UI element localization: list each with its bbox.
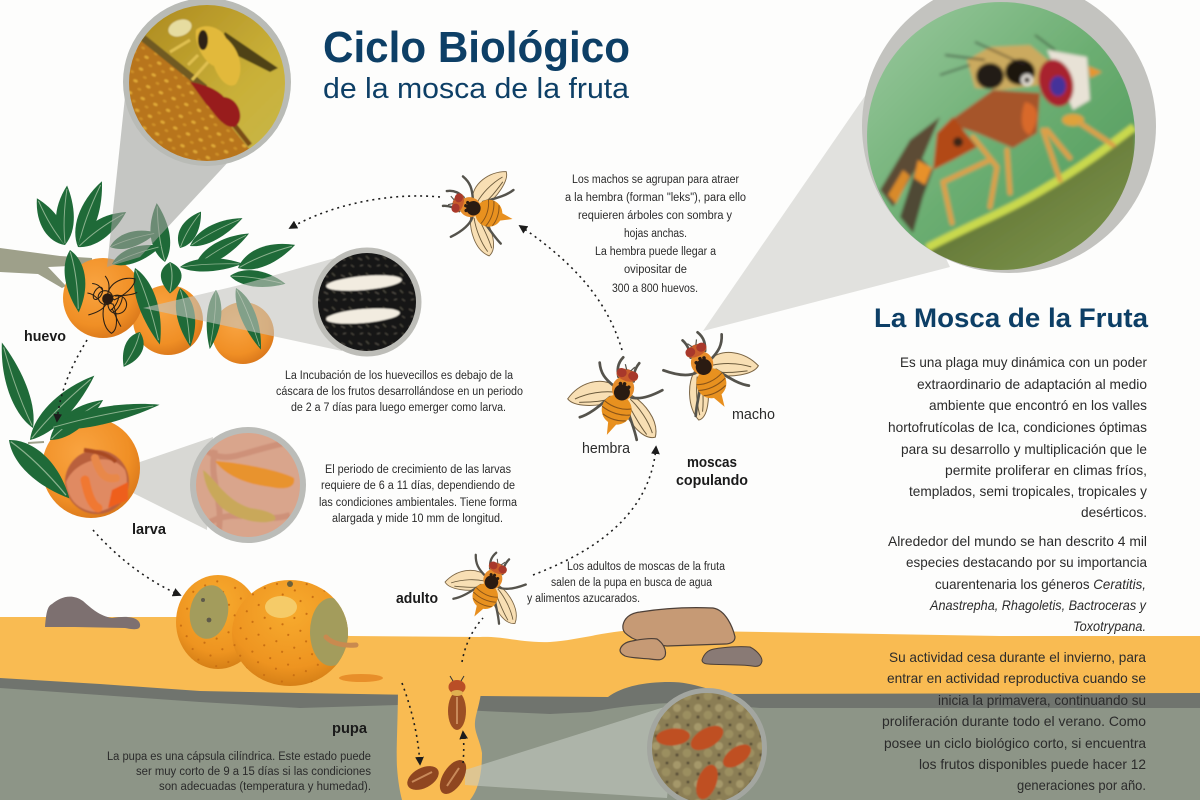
cone: big fly circle to macho <box>703 93 950 331</box>
text: larva growth: alargada y mide 10 mm de longitud. <box>332 513 503 525</box>
rock: large tan <box>623 608 735 646</box>
text: males: Los machos se agrupan para atraer <box>572 174 739 186</box>
heading: la mosca de la fruta: La Mosca de la Fruta <box>874 303 1149 333</box>
title: Ciclo Biológico <box>323 23 630 72</box>
label: larva: larva <box>132 522 167 538</box>
arrow: emerging to adult <box>462 618 483 662</box>
soil: main gray ground <box>0 688 1200 800</box>
fly: top, gathering <box>432 156 526 259</box>
text: paragraph 2: cuarentenaria los géneros Ceratitis, <box>935 576 1146 592</box>
fly: hembra <box>561 345 675 449</box>
label: pupa: pupa <box>332 721 368 737</box>
text: paragraph 2: Toxotrypana. <box>1073 618 1146 634</box>
text: paragraph 1 <box>888 354 1147 520</box>
text: paragraph 1: para su desarrollo y multiplicación que le <box>901 441 1147 457</box>
text: males: a la hembra (forman "leks"), para ello <box>565 192 746 204</box>
text: adults: Los adultos de moscas de la fruta <box>567 561 726 573</box>
text: adults <box>527 561 726 605</box>
text: males <box>565 174 746 295</box>
text: paragraph 3: Su actividad cesa durante el invierno, para <box>889 649 1146 665</box>
icon: fly outline on orange <box>75 262 145 336</box>
text: incubation: La Incubación de los huevecillos es debajo de la <box>285 370 514 382</box>
arrow: fly to fruit <box>290 196 440 228</box>
circle photo: larvae <box>190 427 308 545</box>
text: males: hojas anchas. <box>624 228 687 240</box>
text: incubation <box>276 370 523 414</box>
text: adults: salen de la pupa en busca de agua <box>551 577 713 589</box>
label: macho: macho <box>732 406 775 423</box>
label: moscas copulando: moscas <box>687 455 737 471</box>
label: adulto: adulto <box>396 591 438 607</box>
cone: larva circle to orange <box>133 437 213 530</box>
title: de la mosca de la fruta <box>323 73 630 105</box>
rock: left <box>45 597 140 629</box>
branch oranges <box>63 258 274 364</box>
text: adults: y alimentos azucarados. <box>527 593 640 605</box>
soil: dark gray band <box>0 678 1200 800</box>
infected oranges <box>176 575 356 686</box>
text: males: ovipositar de <box>624 264 687 276</box>
label: moscas copulando <box>676 455 748 489</box>
larva orange with cavity <box>42 418 140 518</box>
text: paragraph 1: desérticos. <box>1081 504 1147 520</box>
soil: yellow layer <box>0 617 1200 800</box>
text: paragraph 3 <box>882 649 1146 793</box>
text: paragraph 3: generaciones por año. <box>1017 777 1146 793</box>
text: males: 300 a 800 huevos. <box>612 283 698 295</box>
text: pupa <box>107 751 371 793</box>
larva on the ground <box>339 674 383 682</box>
label: hembra: hembra <box>582 440 631 457</box>
cone: top circle to orange <box>107 97 230 267</box>
pupae in chamber <box>403 756 472 798</box>
cone: eggs circle to orange <box>143 258 342 351</box>
branch <box>0 248 92 288</box>
soil: pupation chamber <box>397 685 482 800</box>
text: larva growth <box>319 464 518 525</box>
circle photo: fly laying eggs <box>123 0 295 170</box>
text: paragraph 1: templados, semi tropicales, tropicales y <box>909 483 1147 499</box>
text: paragraph 2 <box>888 533 1147 634</box>
rock: gray <box>702 647 762 666</box>
label: huevo: huevo <box>24 329 66 345</box>
arrow: hembra to top fly <box>520 226 622 350</box>
text: paragraph 1: extraordinario de adaptación al medio <box>917 376 1147 392</box>
arrow: egg to larva <box>57 340 87 421</box>
text: paragraph 2: Anastrepha, Rhagoletis, Bactroceras y <box>929 597 1147 613</box>
text: larva growth: las condiciones ambientales. Tiene forma <box>319 497 518 509</box>
text: paragraph 1: ambiente que encontró en los valles <box>929 397 1147 413</box>
text: paragraph 2: especies destacando por su importancia <box>906 554 1147 570</box>
label: moscas copulando: copulando <box>676 473 748 489</box>
text: paragraph 2: Alrededor del mundo se han descrito 4 mil <box>888 533 1147 549</box>
larva branch leaves <box>0 340 161 506</box>
title <box>323 23 630 105</box>
emerging adult from pupa <box>448 676 466 730</box>
circle photo: fruit fly close-up <box>862 0 1156 273</box>
text: paragraph 1: permite proliferar en climas fríos, <box>945 462 1147 478</box>
circle photo: pupae in soil <box>465 688 767 800</box>
text: larva growth: El periodo de crecimiento de las larvas <box>325 464 511 476</box>
circle photo: eggs <box>312 248 422 356</box>
text: males: requieren árboles con sombra y <box>578 210 732 222</box>
text: larva growth: requiere de 6 a 11 días, dependiendo de <box>321 480 515 492</box>
leaves on the branch <box>28 178 298 371</box>
text: paragraph 1: Es una plaga muy dinámica con un poder <box>900 354 1147 370</box>
text: paragraph 3: proliferación durante todo el verano. Como <box>882 713 1146 729</box>
text: incubation: de 2 a 7 días para luego emerger como larva. <box>291 402 506 414</box>
text: pupa: ser muy corto de 9 a 15 días si las condiciones <box>136 766 371 778</box>
text: paragraph 3: entrar en actividad reproductiva cuando se <box>887 670 1146 686</box>
arrow: pupa to emerging <box>462 732 465 763</box>
arrow: larva to pupa <box>402 683 420 764</box>
text: paragraph 3: inicia la primavera, continuando su <box>938 692 1146 708</box>
text: paragraph 3: los frutos disponibles puede hacer 12 <box>919 756 1146 772</box>
arrow: larva to fallen fruit <box>93 530 180 595</box>
text: paragraph 1: hortofrutícolas de Ica, condiciones óptimas <box>888 419 1147 435</box>
arrow: adult to hembra <box>533 447 656 575</box>
rock: small tan <box>620 639 666 660</box>
text: males: La hembra puede llegar a <box>595 246 717 258</box>
text: paragraph 3: posee un ciclo biológico corto, si encuentra <box>884 735 1146 751</box>
text: pupa: La pupa es una cápsula cilíndrica. Este estado puede <box>107 751 371 763</box>
fly: adulto <box>437 539 538 633</box>
text: incubation: cáscara de los frutos desarrollándose en un periodo <box>276 386 523 398</box>
fly: macho <box>655 315 769 425</box>
text: pupa: son adecuadas (temperatura y humedad). <box>159 781 371 793</box>
